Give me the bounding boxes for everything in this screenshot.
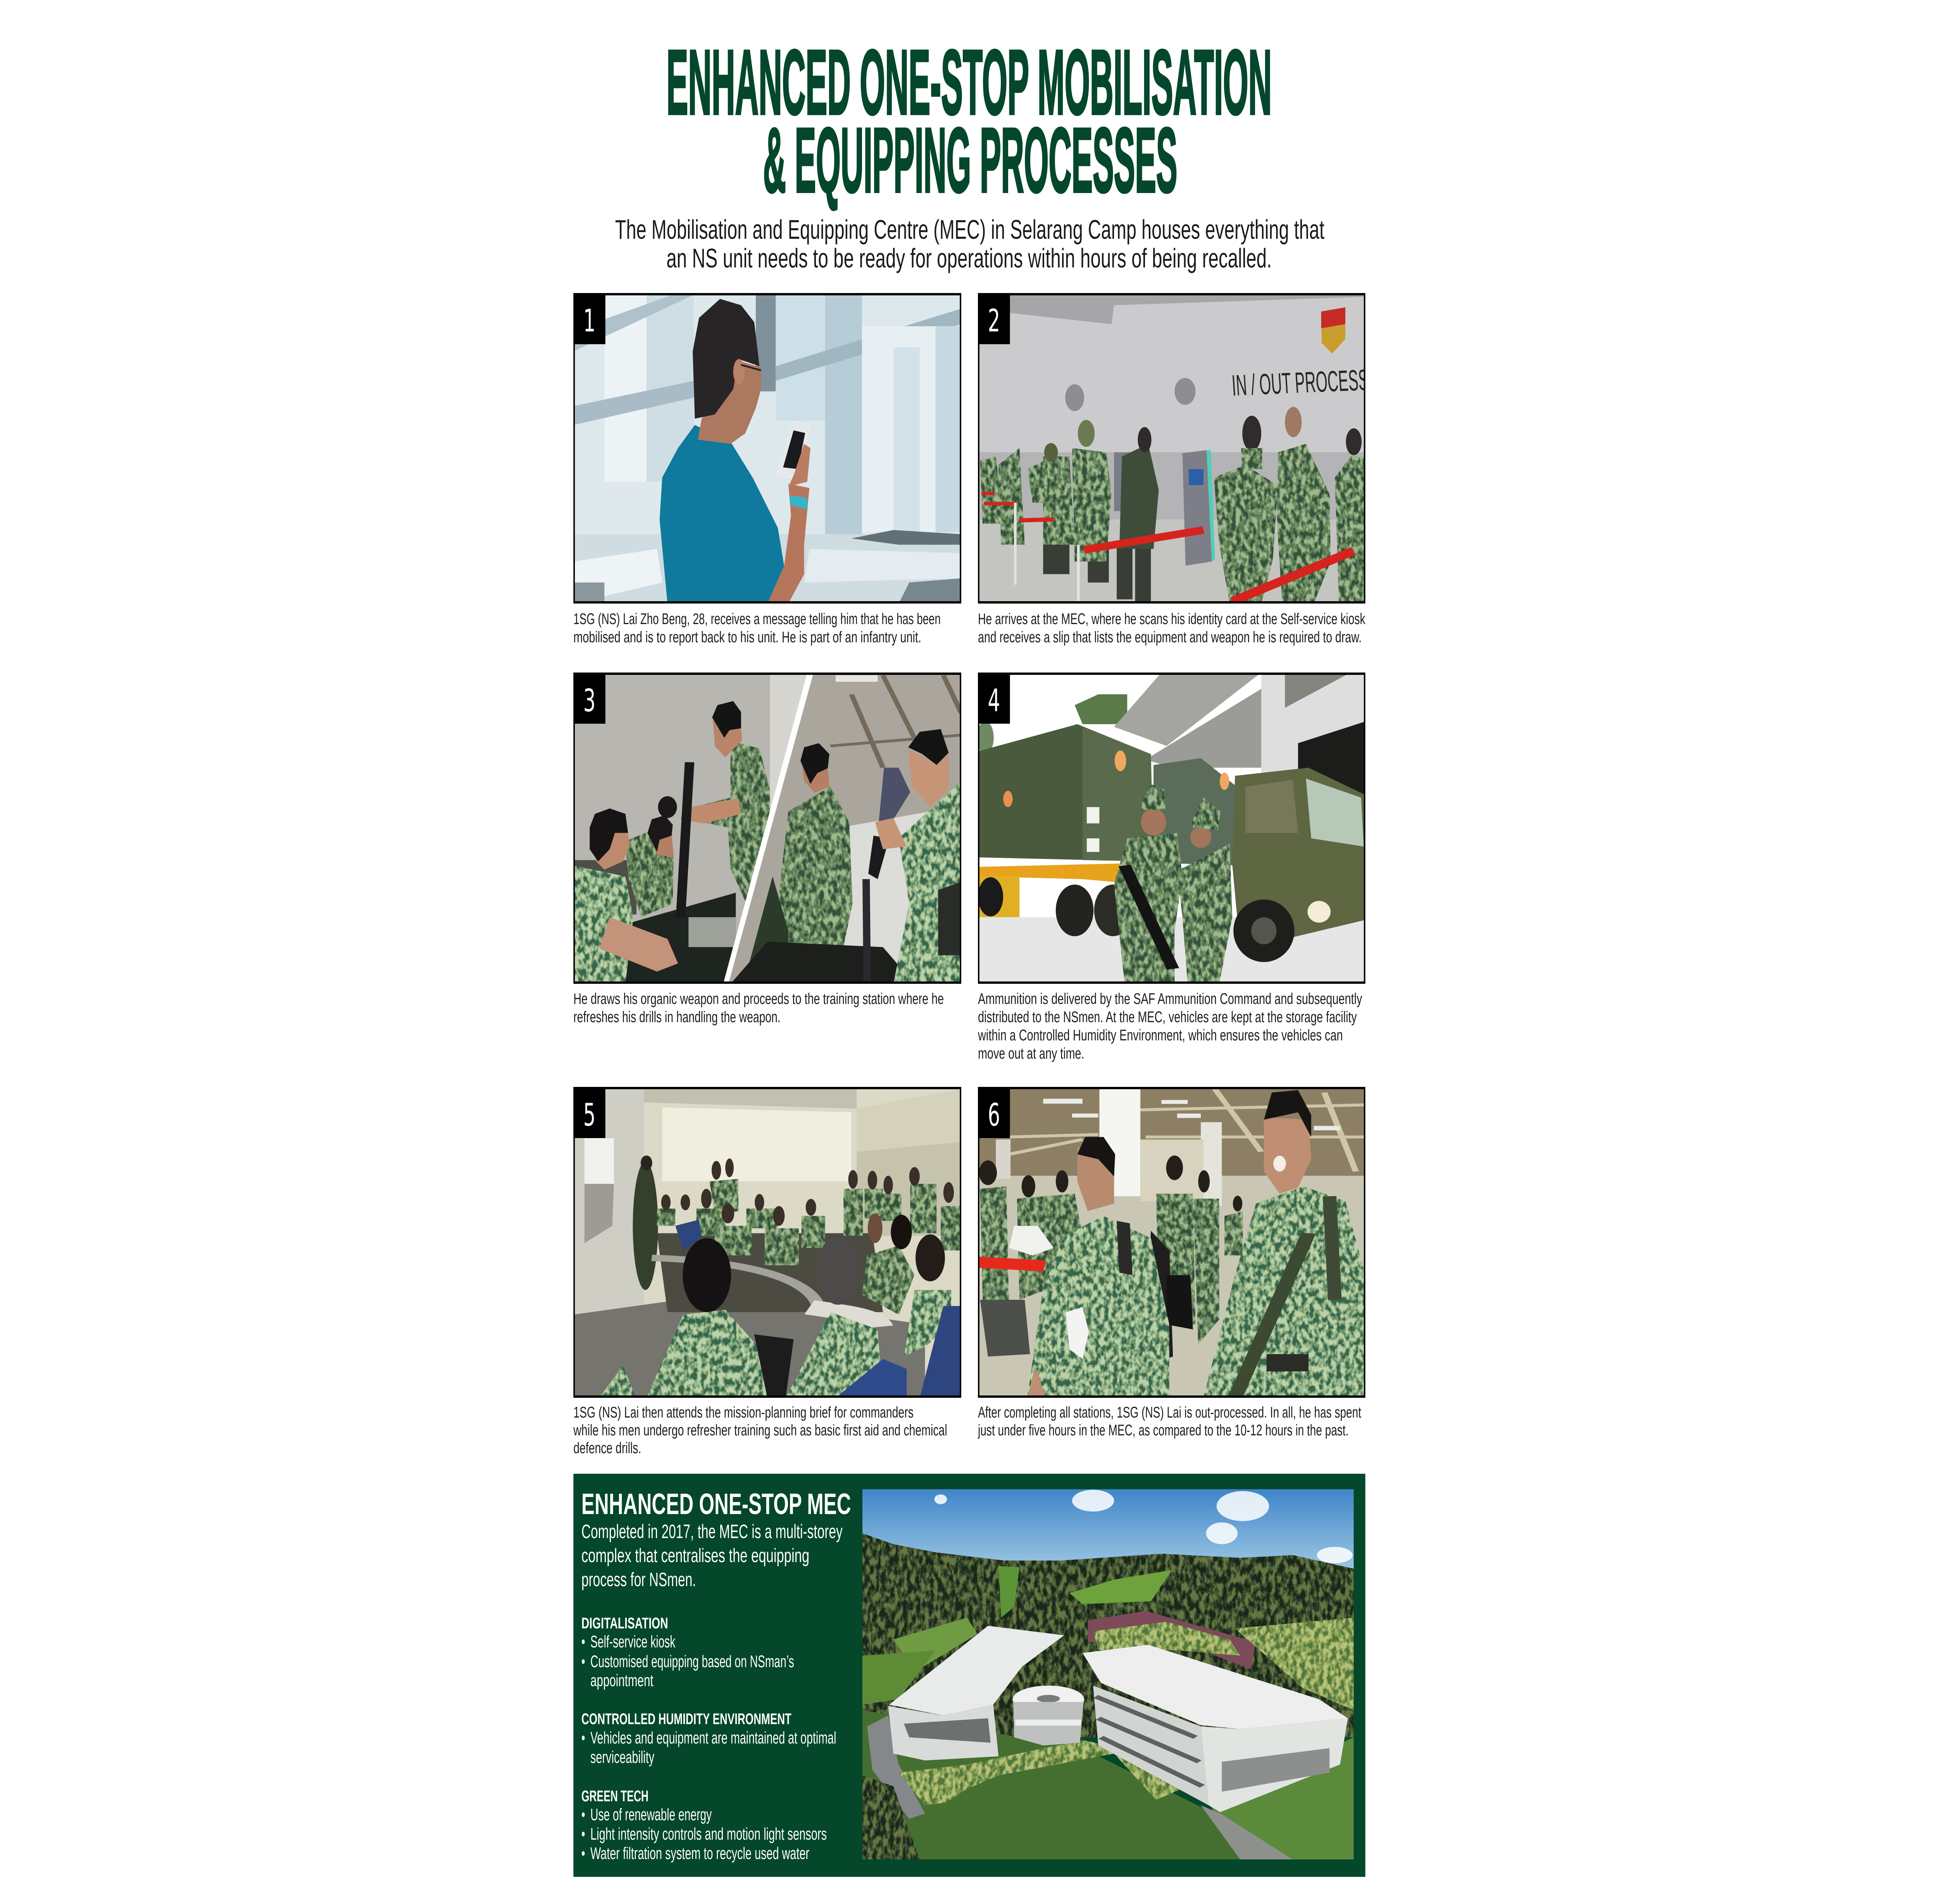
caption: He draws his organic weapon and proceeds to the training station where he [573, 990, 944, 1008]
number badge: 3 [583, 683, 596, 719]
title [666, 31, 1272, 211]
caption [573, 611, 941, 646]
intro paragraph [581, 1520, 843, 1590]
list: digitalisation: appointment [590, 1671, 653, 1690]
number badge: 6 [988, 1097, 1000, 1133]
list: controlled humidity environment: • [581, 1728, 585, 1747]
panel: step 2 [978, 293, 1369, 646]
photo frame [979, 674, 1365, 983]
list: digitalisation: • [581, 1652, 585, 1671]
number badge [573, 673, 605, 724]
intro paragraph: complex that centralises the equipping [581, 1544, 809, 1566]
list: green tech: • [581, 1805, 585, 1824]
panel: step 1 [573, 293, 961, 646]
panel: step 6 [978, 1087, 1365, 1439]
number badge: 2 [988, 303, 1000, 339]
title: ENHANCED ONE-STOP MOBILISATION [666, 31, 1272, 133]
list: green tech: Light intensity controls and motion light sensors [590, 1824, 827, 1844]
caption: just under five hours in the MEC, as compared to the 10-12 hours in the past. [978, 1422, 1348, 1439]
caption: distributed to the NSmen. At the MEC, vehicles are kept at the storage facility [978, 1009, 1357, 1026]
intro paragraph: process for NSmen. [581, 1568, 696, 1590]
list: digitalisation [581, 1615, 794, 1690]
intro text: an NS unit needs to be ready for operations within hours of being recalled. [666, 243, 1272, 274]
photo: smiling soldiers out-processed [978, 1087, 1365, 1398]
caption: defence drills. [573, 1440, 641, 1457]
list: digitalisation: DIGITALISATION [581, 1615, 668, 1632]
photo frame [979, 294, 1365, 602]
photo frame [574, 1088, 960, 1397]
caption: move out at any time. [978, 1045, 1085, 1062]
panel background [573, 1474, 1365, 1877]
intro text [615, 215, 1324, 274]
list: controlled humidity environment [581, 1711, 836, 1767]
number badge: 1 [583, 303, 596, 339]
list: green tech [581, 1788, 827, 1863]
list: green tech: GREEN TECH [581, 1788, 648, 1805]
caption [978, 1404, 1361, 1439]
caption: 1SG (NS) Lai Zho Beng, 28, receives a message telling him that he has been [573, 611, 941, 628]
title: & EQUIPPING PROCESSES [763, 109, 1178, 211]
caption: within a Controlled Humidity Environment, which ensures the vehicles can [978, 1027, 1343, 1044]
panel: enhanced one-stop MEC [573, 1474, 1365, 1877]
list: green tech: Water filtration system to recycle used water [590, 1844, 809, 1863]
number badge [978, 673, 1010, 724]
intro paragraph: Completed in 2017, the MEC is a multi-storey [581, 1520, 843, 1542]
number badge [978, 1087, 1010, 1138]
caption [978, 611, 1366, 646]
photo frame [574, 674, 960, 983]
caption [573, 990, 944, 1026]
caption: After completing all stations, 1SG (NS) Lai is out-processed. In all, he has spent [978, 1404, 1361, 1421]
photo: drawing weapon and training station [573, 673, 961, 984]
photo: mission-planning brief [573, 1087, 961, 1398]
list: controlled humidity environment: CONTROLLED HUMIDITY ENVIRONMENT [581, 1711, 791, 1728]
panel: step 5 [573, 1087, 961, 1457]
photo: soldiers at self-service kiosks [978, 293, 1369, 604]
caption: refreshes his drills in handling the weapon. [573, 1009, 781, 1026]
list: green tech: Use of renewable energy [590, 1805, 712, 1824]
caption: 1SG (NS) Lai then attends the mission-planning brief for commanders [573, 1404, 914, 1421]
photo frame [979, 1088, 1365, 1397]
list: green tech: • [581, 1824, 585, 1844]
panel: step 3 [573, 673, 961, 1026]
caption [573, 1404, 947, 1457]
photo frame [574, 294, 960, 602]
caption: mobilised and is to report back to his unit. He is part of an infantry unit. [573, 629, 921, 646]
list: digitalisation: Customised equipping based on NSman’s [590, 1652, 794, 1671]
list: digitalisation: Self-service kiosk [590, 1632, 676, 1651]
photo: man reading phone message at window [573, 293, 961, 604]
number badge: 4 [988, 683, 1000, 719]
intro text: The Mobilisation and Equipping Centre (MEC) in Selarang Camp houses everything that [615, 215, 1324, 245]
list: controlled humidity environment: serviceability [590, 1747, 655, 1767]
image: aerial view of MEC building [862, 1489, 1353, 1859]
number badge [978, 293, 1010, 344]
list: green tech: • [581, 1844, 585, 1863]
number badge [573, 293, 605, 344]
list: digitalisation: • [581, 1632, 585, 1651]
caption: and receives a slip that lists the equipment and weapon he is required to draw. [978, 629, 1362, 646]
heading: ENHANCED ONE-STOP MEC [581, 1488, 851, 1521]
list: controlled humidity environment: Vehicles and equipment are maintained at optimal [590, 1728, 836, 1747]
number badge: 5 [583, 1097, 596, 1133]
number badge [573, 1087, 605, 1138]
panel: step 4 [977, 673, 1365, 1062]
caption: Ammunition is delivered by the SAF Ammunition Command and subsequently [978, 990, 1362, 1008]
caption: He arrives at the MEC, where he scans his identity card at the Self-service kiosk [978, 611, 1366, 628]
photo: ammunition trucks and soldiers [977, 673, 1365, 984]
caption: while his men undergo refresher training such as basic first aid and chemical [573, 1422, 947, 1439]
caption [978, 990, 1362, 1062]
